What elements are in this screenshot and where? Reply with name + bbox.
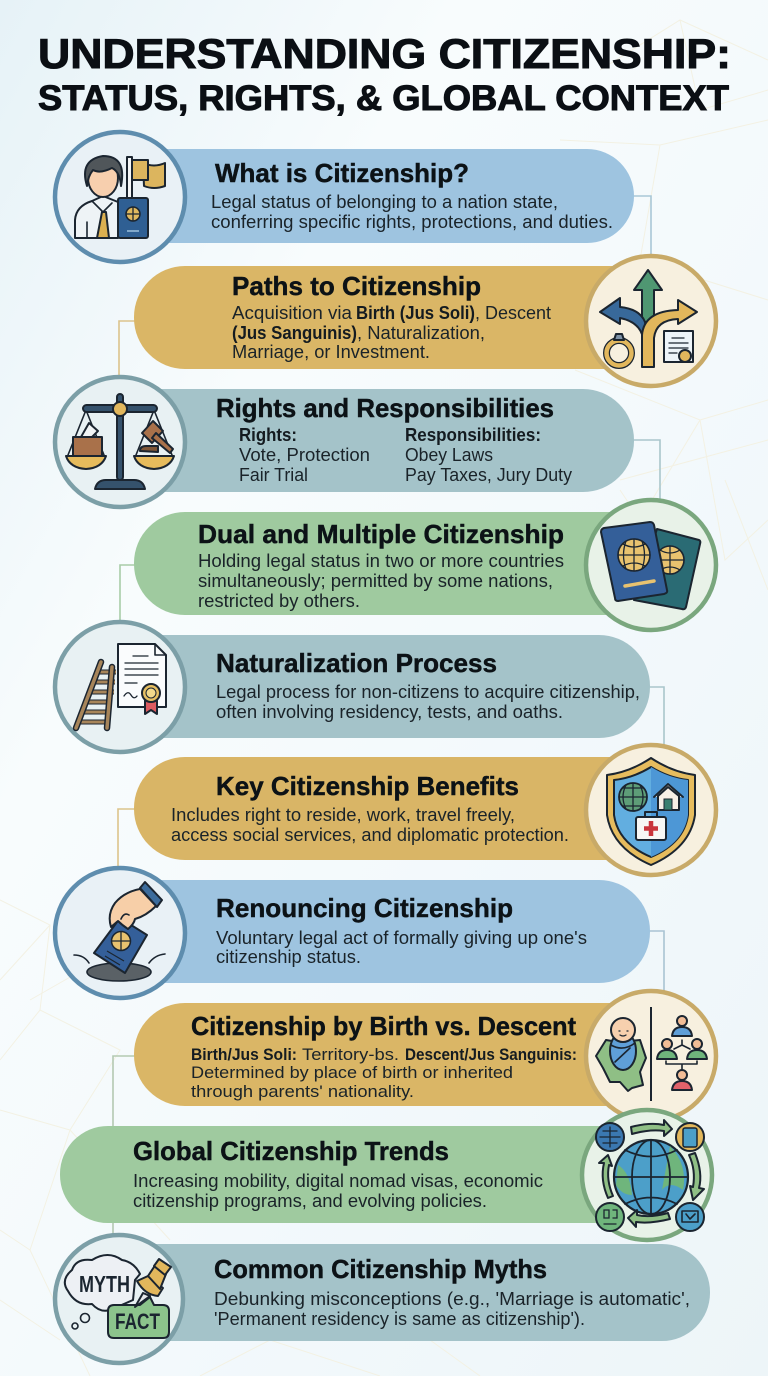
description: access social services, and diplomatic protection. (171, 824, 569, 845)
pill background (80, 635, 650, 738)
description: citizenship programs, and evolving policies. (133, 1190, 487, 1211)
icon: myth and fact speech bubbles with pin: MYTH (79, 1271, 130, 1297)
description: Marriage, or Investment. (232, 341, 430, 362)
rights column: Rights: (239, 424, 297, 445)
description: conferring specific rights, protections, and duties. (211, 211, 613, 232)
rights column (239, 424, 370, 485)
title: UNDERSTANDING CITIZENSHIP: (38, 30, 731, 77)
panel: what is citizenship (55, 132, 634, 262)
heading: Common Citizenship Myths (214, 1254, 547, 1284)
description: Birth/Jus Soli: (191, 1045, 297, 1064)
title (38, 30, 731, 118)
description: Holding legal status in two or more countries (198, 550, 564, 571)
description (133, 1170, 543, 1211)
description: simultaneously; permitted by some nations, (198, 570, 553, 591)
description: Voluntary legal act of formally giving up one's (216, 927, 587, 948)
pill background (134, 1003, 684, 1106)
description: Descent/Jus Sanguinis: (405, 1045, 577, 1064)
icon: citizen with flag and passport (55, 132, 185, 262)
description: Legal status of belonging to a nation state, (211, 191, 558, 212)
description: Acquisition via (232, 302, 353, 323)
pill background (134, 266, 684, 369)
heading: Rights and Responsibilities (216, 393, 554, 423)
rights column: Fair Trial (239, 464, 308, 485)
panel: renouncing citizenship (55, 868, 650, 998)
description: (Jus Sanguinis) (232, 322, 357, 343)
responsibilities column: Pay Taxes, Jury Duty (405, 464, 573, 485)
pill background (60, 1126, 680, 1223)
heading: Citizenship by Birth vs. Descent (191, 1011, 576, 1041)
icon: diverging paths, ring and certificate (586, 256, 716, 386)
description (211, 191, 613, 232)
description: Debunking misconceptions (e.g., 'Marriage is automatic', (214, 1288, 690, 1309)
description: , Naturalization, (357, 322, 485, 343)
icon: myth and fact speech bubbles with pin: FACT (115, 1309, 160, 1334)
heading: Naturalization Process (216, 648, 497, 678)
panel: key citizenship benefits (134, 745, 716, 875)
icon: hand dropping passport (55, 868, 185, 998)
description: Legal process for non-citizens to acquire citizenship, (216, 681, 640, 702)
description: Determined by place of birth or inherited (191, 1063, 513, 1082)
icon: myth and fact speech bubbles with pin (55, 1235, 183, 1363)
panel: global citizenship trends (60, 1110, 712, 1240)
icon: ladder and certificate (55, 622, 185, 752)
responsibilities column (405, 424, 573, 485)
heading: Global Citizenship Trends (133, 1136, 449, 1166)
heading: Dual and Multiple Citizenship (198, 519, 564, 549)
panel: naturalization process (55, 622, 650, 752)
panel: rights and responsibilities (55, 377, 634, 507)
panel: dual and multiple citizenship (134, 500, 716, 630)
heading: Renouncing Citizenship (216, 893, 513, 923)
panel: citizenship by birth vs descent (134, 991, 716, 1121)
icon: shield with globe, house and medical kit (586, 745, 716, 875)
pill background (80, 389, 634, 492)
icon: balance scale (55, 377, 185, 507)
description (171, 804, 569, 845)
pill background (80, 149, 634, 243)
description (232, 302, 551, 362)
description (216, 681, 640, 722)
heading: Paths to Citizenship (232, 271, 481, 301)
responsibilities column: Obey Laws (405, 444, 493, 465)
icon: baby on territory and family tree (586, 991, 716, 1121)
description: restricted by others. (198, 590, 360, 611)
pill background (80, 1244, 710, 1341)
description: Includes right to reside, work, travel freely, (171, 804, 515, 825)
description (198, 550, 564, 611)
description: , Descent (475, 302, 551, 323)
icon: two passports (586, 500, 716, 630)
description: Birth (Jus Soli) (356, 302, 475, 323)
description: through parents' nationality. (191, 1082, 414, 1101)
icon: globe with orbiting arrows (582, 1110, 712, 1240)
pill background (80, 880, 650, 983)
description: Increasing mobility, digital nomad visas, economic (133, 1170, 543, 1191)
pill background (134, 512, 684, 615)
pill background (134, 757, 684, 860)
description: often involving residency, tests, and oaths. (216, 701, 563, 722)
description (191, 1045, 577, 1101)
panel: paths to citizenship (134, 256, 716, 386)
description: citizenship status. (216, 946, 361, 967)
heading: Key Citizenship Benefits (216, 771, 519, 801)
description: 'Permanent residency is same as citizenship'). (214, 1308, 585, 1329)
rights column: Vote, Protection (239, 444, 370, 465)
description (216, 927, 587, 967)
panel: common citizenship myths (55, 1235, 710, 1363)
responsibilities column: Responsibilities: (405, 424, 541, 445)
description (214, 1288, 690, 1329)
heading: What is Citizenship? (215, 158, 469, 188)
title: STATUS, RIGHTS, & GLOBAL CONTEXT (38, 79, 729, 118)
description: Territory-bs. (302, 1045, 399, 1064)
